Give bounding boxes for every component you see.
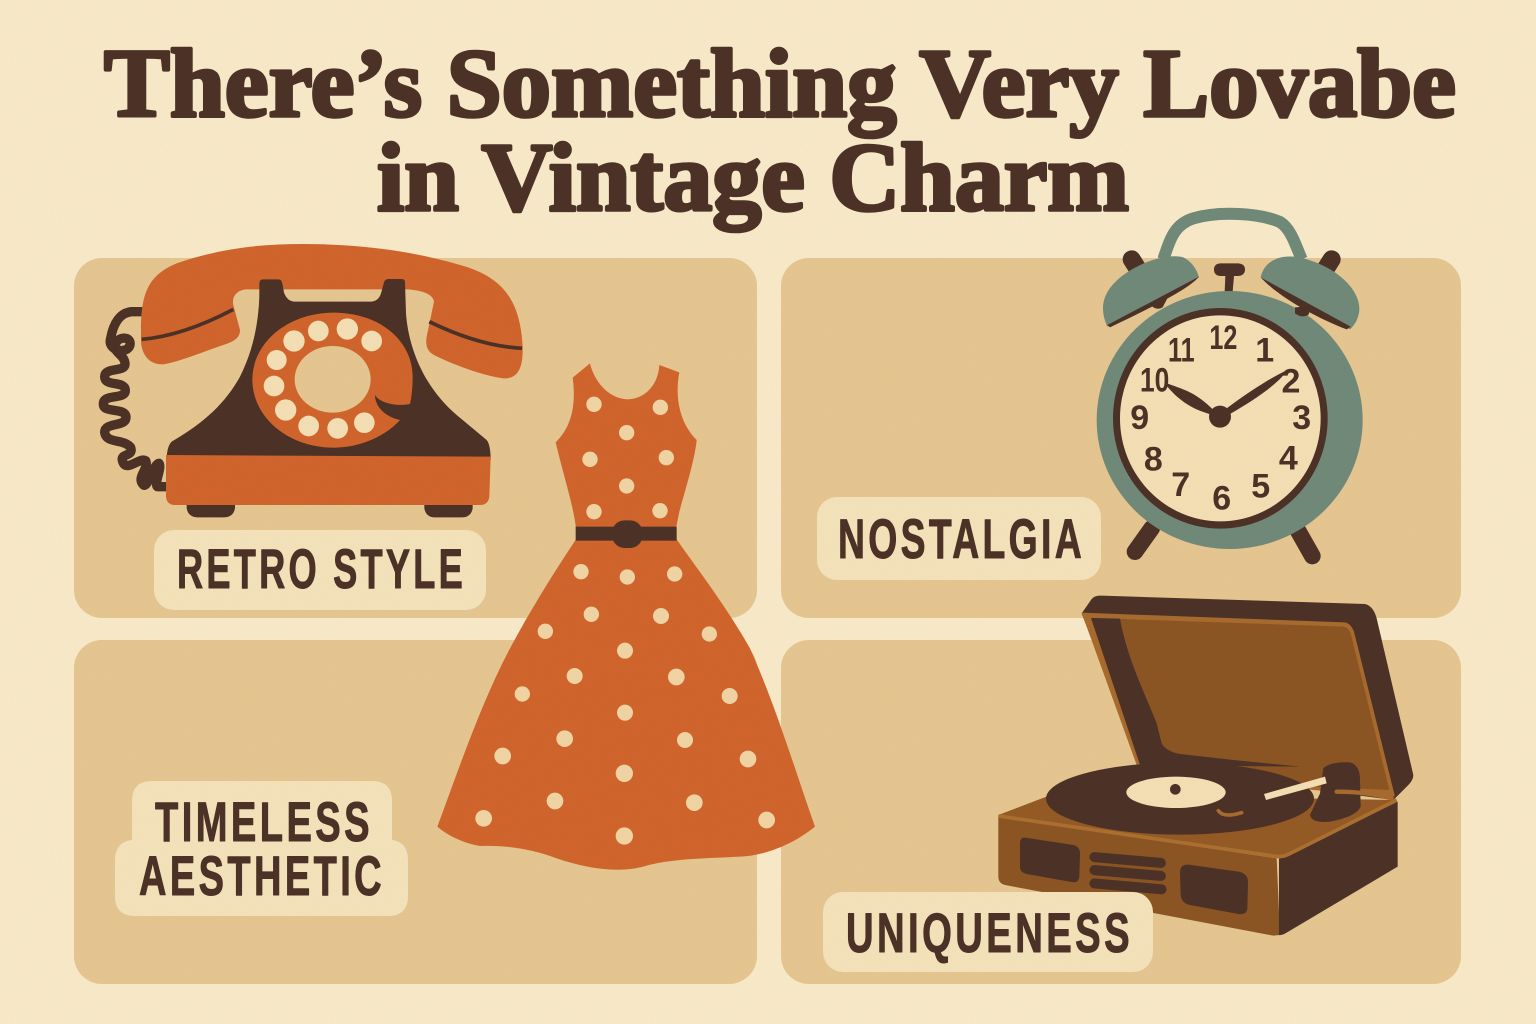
icon: alarm clock [1097, 214, 1363, 556]
panel: uniqueness [781, 640, 1461, 984]
panel: retro style [74, 258, 757, 618]
panel: timeless aesthetic [74, 640, 757, 984]
clock numerals: 11 [1168, 332, 1195, 370]
dress bodice [556, 363, 697, 528]
label: nostalgia: NOSTALGIA [838, 507, 1085, 570]
clock numerals: 6 [1212, 479, 1231, 517]
winding key [1214, 263, 1245, 292]
clock numerals: 7 [1171, 466, 1190, 504]
clock numerals: 1 [1255, 332, 1274, 370]
polka dots [475, 397, 775, 845]
clock numerals: 5 [1251, 467, 1270, 505]
clock numerals: 12 [1209, 319, 1237, 357]
title: There’s Something Very Lovabe [104, 30, 1456, 137]
cabinet [998, 794, 1398, 936]
label: timeless aesthetic: TIMELESS [155, 790, 373, 853]
handset [141, 244, 523, 378]
tonearm base [1310, 762, 1361, 822]
telephone body [167, 279, 491, 460]
icon: polka dot dress [437, 363, 815, 870]
clock case [1097, 291, 1363, 549]
label: uniqueness: UNIQUENESS [846, 901, 1133, 964]
label: nostalgia [817, 497, 1101, 580]
title: in Vintage Charm [377, 124, 1129, 231]
telephone base and feet [187, 503, 473, 517]
belt and buckle [576, 520, 677, 548]
clock numerals: 10 [1140, 362, 1169, 400]
clock feet [1135, 528, 1312, 556]
right bell [1261, 256, 1359, 329]
vinyl record [1046, 763, 1314, 835]
panel: nostalgia [781, 258, 1461, 618]
dress skirt [437, 539, 815, 870]
label: uniqueness [823, 892, 1153, 972]
clock numerals: 3 [1292, 399, 1311, 437]
label: timeless aesthetic [115, 781, 408, 916]
label: timeless aesthetic: AESTHETIC [139, 844, 385, 907]
telephone cord [103, 312, 166, 487]
clock numerals: 9 [1130, 399, 1149, 437]
label: retro style: RETRO STYLE [177, 537, 466, 600]
label: retro style [154, 530, 486, 610]
clock numerals: 8 [1144, 441, 1163, 479]
clock hands [1167, 369, 1288, 428]
clock numerals: 2 [1282, 363, 1300, 401]
left bell [1103, 256, 1199, 327]
bell knobs [1132, 259, 1332, 268]
clock numerals [1130, 319, 1311, 517]
speaker grilles [1020, 838, 1248, 914]
open lid [1082, 596, 1413, 800]
clock handle [1163, 214, 1302, 259]
title [104, 30, 1456, 231]
clock numerals: 4 [1279, 439, 1298, 477]
icon: rotary telephone [103, 244, 523, 517]
rotary dial [252, 313, 413, 448]
icon: record player [998, 596, 1413, 936]
tonearm [1264, 777, 1392, 800]
